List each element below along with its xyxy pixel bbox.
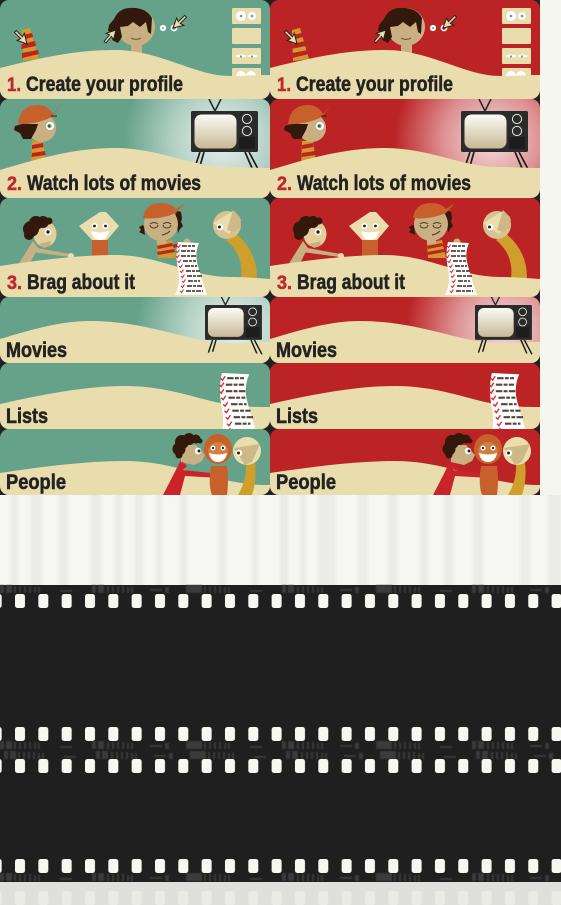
heading: Lists — [276, 405, 318, 428]
icon: checklist — [175, 242, 207, 295]
wave — [0, 50, 270, 99]
panel: movies, red — [270, 295, 540, 363]
heading — [277, 174, 470, 190]
panel: lists, green — [0, 363, 270, 442]
illustration: four characters — [18, 203, 257, 278]
tv glow — [390, 99, 540, 198]
illustration: character in cap — [284, 105, 330, 161]
heading: People — [276, 471, 336, 494]
icon: tv — [461, 99, 528, 169]
heading: Create your profile — [26, 73, 183, 96]
heading: 2. — [7, 174, 22, 195]
heading: Watch lots of movies — [297, 172, 471, 195]
panel: watch lots of movies, red — [270, 99, 540, 198]
wave — [270, 50, 540, 99]
wave — [270, 386, 540, 429]
wave — [0, 461, 270, 495]
heading: Create your profile — [296, 73, 453, 96]
panel: lists, red — [270, 363, 540, 442]
panel: people, green — [0, 429, 270, 495]
wave — [270, 321, 540, 363]
icon: tv — [475, 295, 532, 354]
panel: brag about it, green — [0, 198, 270, 297]
film edge markings — [0, 585, 561, 881]
tv glow — [120, 99, 270, 198]
strip below film — [0, 882, 561, 905]
wave — [270, 148, 540, 198]
heading: 2. — [277, 174, 292, 195]
icon: checklist — [218, 373, 260, 442]
panel: create your profile, red — [270, 0, 540, 99]
icon: tv — [191, 99, 258, 169]
wave — [0, 321, 270, 363]
heading — [7, 174, 200, 190]
wave — [0, 386, 270, 429]
illustration: character in cap — [14, 104, 60, 161]
heading: 3. — [7, 273, 22, 294]
illustration: three friends — [433, 433, 531, 495]
panel: create your profile, green — [0, 0, 270, 99]
panel: movies, green — [0, 295, 270, 363]
illustration: three friends — [163, 433, 261, 495]
icon: tv — [205, 295, 262, 354]
heading: Movies — [6, 339, 67, 362]
heading: Brag about it — [27, 271, 135, 294]
wave — [0, 148, 270, 198]
panel backing — [0, 0, 540, 495]
paper texture band — [11, 495, 560, 585]
illustration: four characters — [288, 203, 527, 278]
illustration: profile character and swatches — [284, 8, 531, 84]
heading: Brag about it — [297, 271, 405, 294]
tv glow — [130, 297, 270, 363]
icon: checklist — [488, 373, 530, 442]
heading: 1. — [7, 75, 21, 96]
wave — [0, 255, 270, 297]
heading: People — [6, 471, 66, 494]
panel: brag about it, red — [270, 198, 540, 297]
panel: watch lots of movies, green — [0, 99, 270, 198]
tv glow — [400, 297, 540, 363]
heading: 1. — [277, 75, 291, 96]
heading: 3. — [277, 273, 292, 294]
heading: Movies — [276, 339, 337, 362]
film strip — [0, 585, 561, 905]
heading: Lists — [6, 405, 48, 428]
illustration: profile character and swatches — [14, 8, 261, 84]
icon: checklist — [445, 242, 477, 295]
sprocket holes — [0, 590, 561, 905]
panel: people, red — [270, 429, 540, 495]
heading: Watch lots of movies — [27, 172, 201, 195]
wave — [270, 255, 540, 297]
wave — [270, 461, 540, 495]
